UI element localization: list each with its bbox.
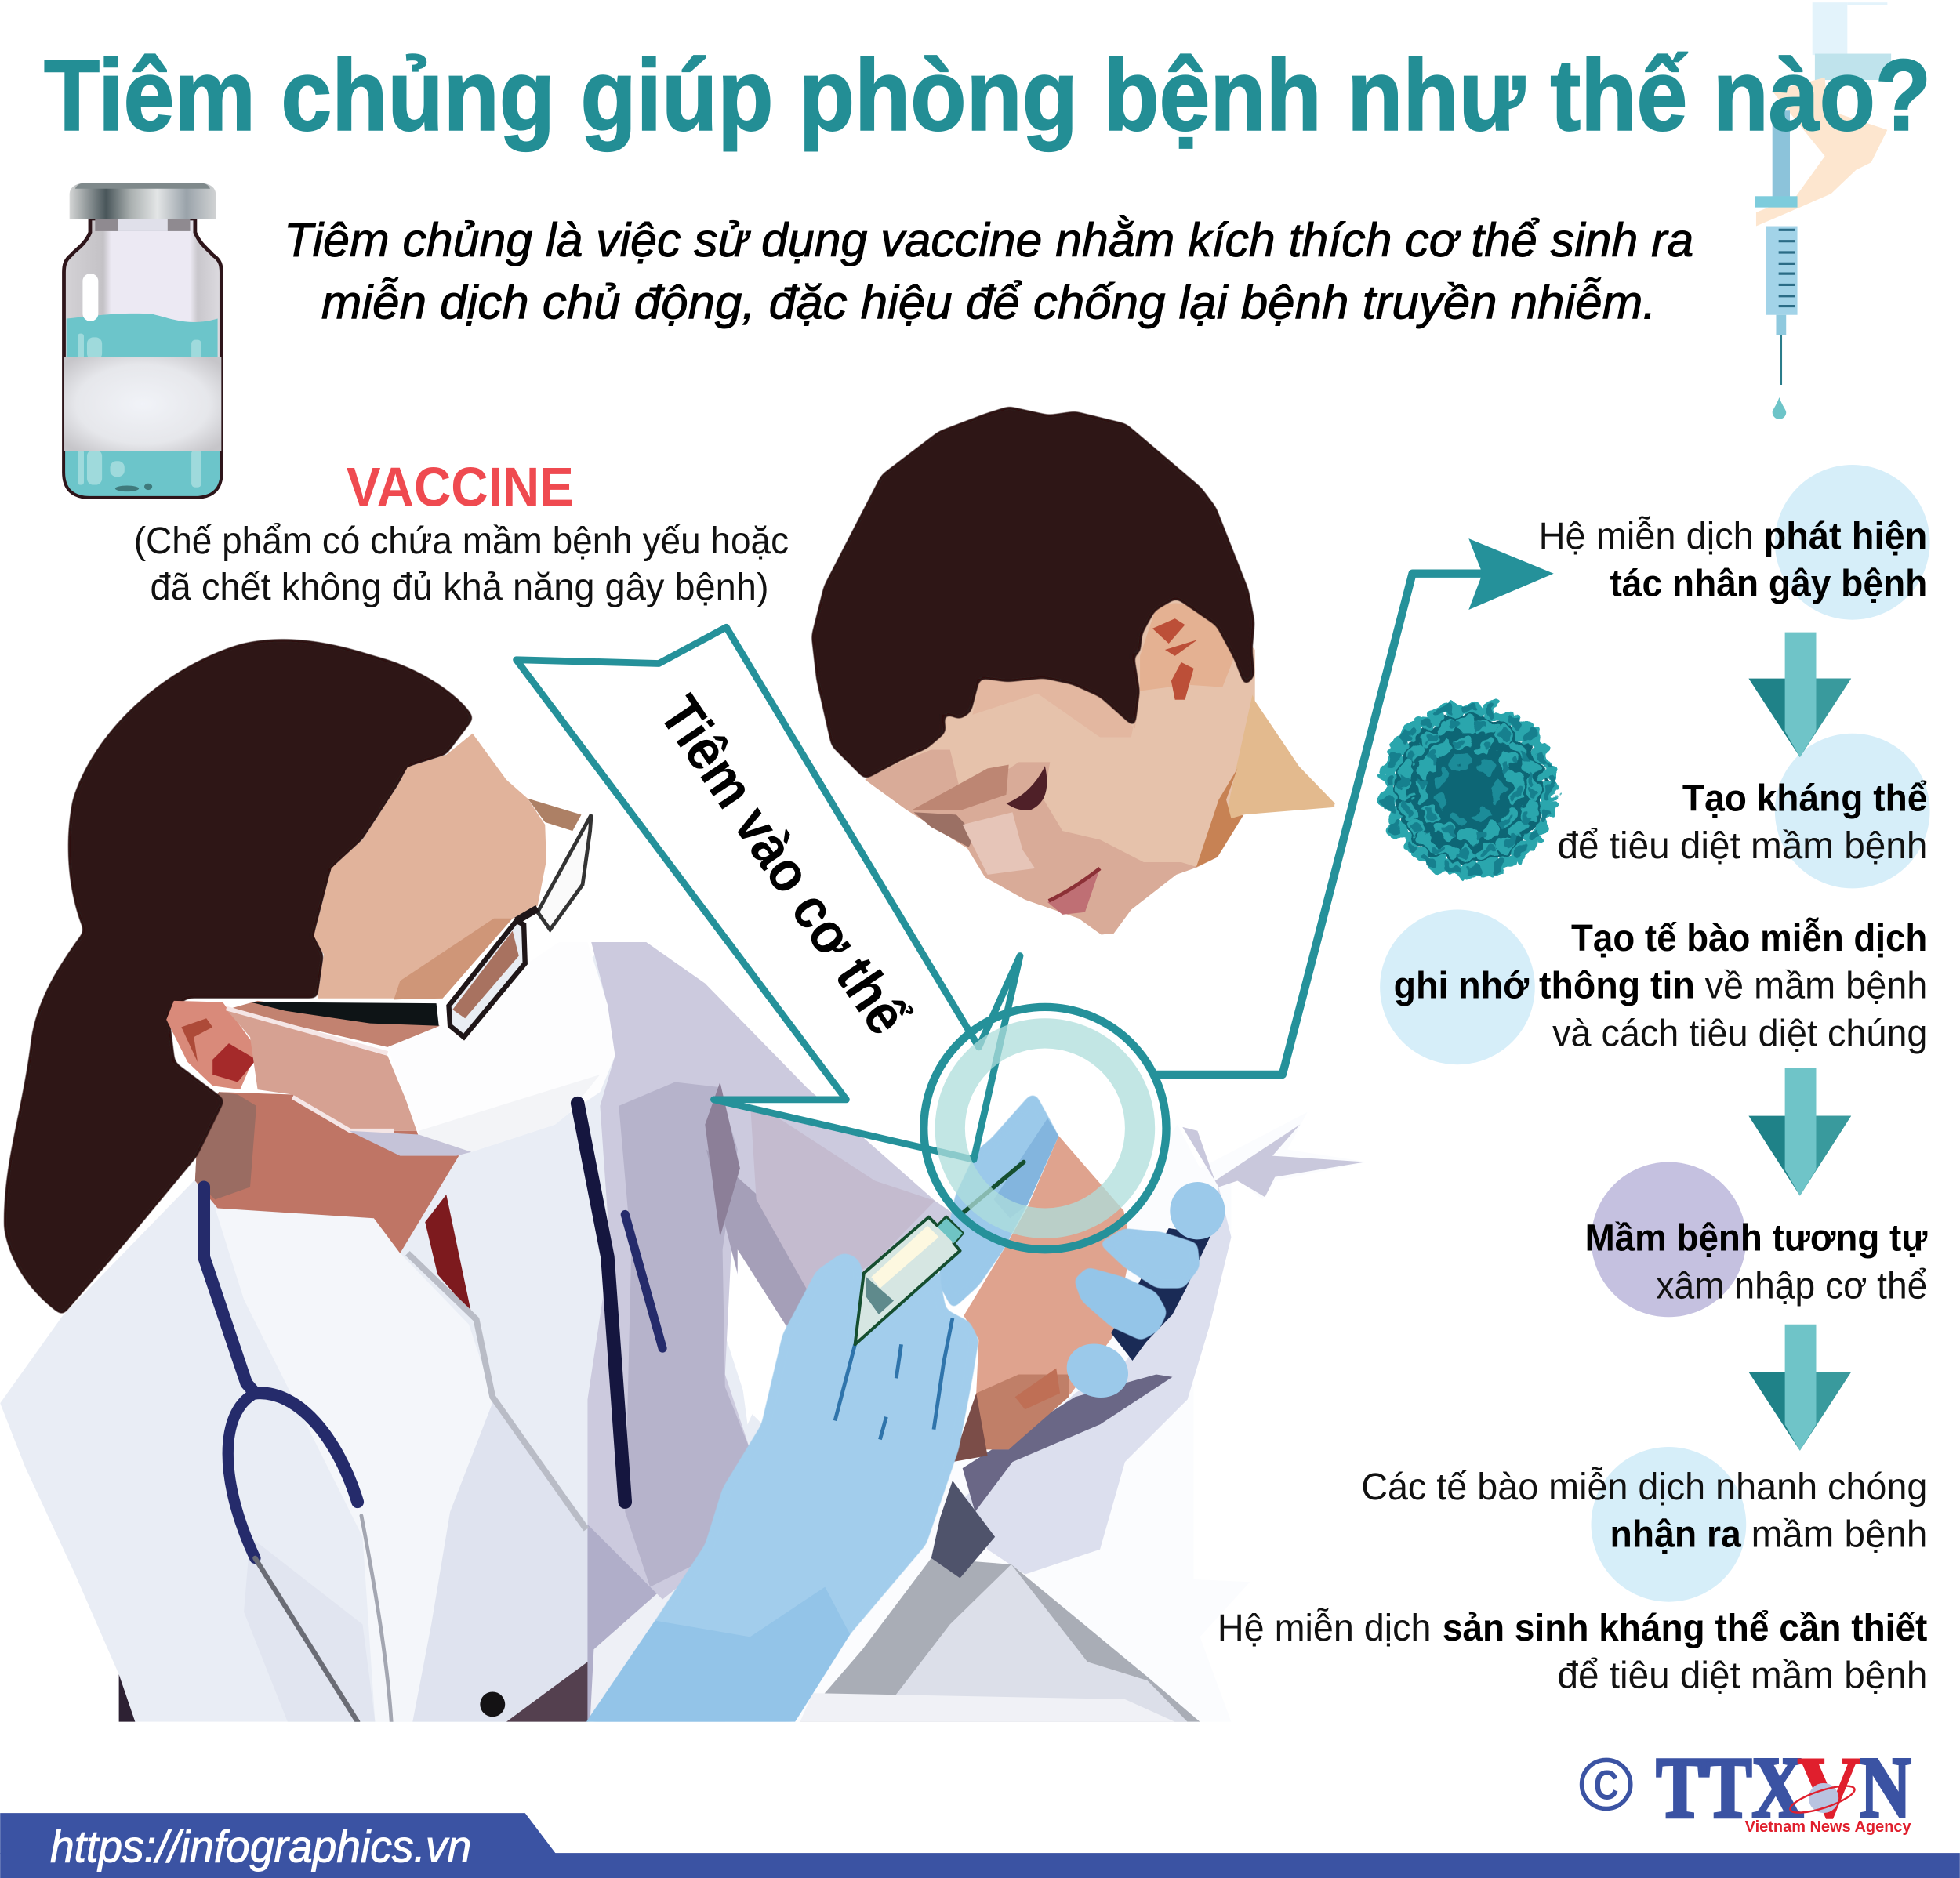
step 2 text: để tiêu diệt mầm bệnh <box>1557 825 1927 867</box>
illustration: glasses <box>250 814 591 1037</box>
illustration: patient's clothing <box>800 1125 1364 1722</box>
callout: Tiêm vào cơ thể: Tiêm vào cơ thể <box>647 684 920 1046</box>
circle: step 1 background <box>1775 465 1930 620</box>
arrow: step 1 to 2 <box>1748 633 1851 757</box>
step 5 text: nhận ra <box>1610 1514 1741 1556</box>
footer bar with website <box>0 1813 1960 1878</box>
step 4 text <box>1585 1218 1928 1307</box>
illustration: boy's head <box>811 406 1335 934</box>
step 6 text: sản sinh kháng thể cần thiết <box>1443 1608 1927 1649</box>
vaccine description: (Chế phẩm có chứa mầm bệnh yếu hoặc <box>134 520 789 562</box>
step 5 text: Các tế bào miễn dịch nhanh chóng <box>1361 1466 1927 1508</box>
footer bar with website: https://infographics.vn <box>50 1822 471 1872</box>
intro text: Tiêm chủng là việc sử dụng vaccine nhằm kích thích cơ thể sinh ra <box>284 213 1693 266</box>
step 5 text: mầm bệnh <box>1751 1514 1927 1556</box>
logo: TTXVN: N <box>1860 1740 1911 1836</box>
step 4 text: xâm nhập cơ thể <box>1656 1265 1927 1307</box>
illustration: stethoscope <box>204 1104 662 1722</box>
circle: step 2 background <box>1775 734 1930 888</box>
illustration: magnifier ring <box>924 1007 1167 1249</box>
step 5 text <box>1361 1466 1927 1556</box>
icon: syringe and hand top right <box>1755 2 1891 419</box>
illustration: doctor's neck, ear and red shirt <box>195 1092 586 1529</box>
illustration: doctor's gloved hand <box>586 1253 978 1722</box>
intro text <box>284 213 1693 329</box>
illustration: small syringe <box>855 1162 1024 1344</box>
magnifier background <box>924 1007 1167 1249</box>
logo: TTXVN: V <box>1798 1740 1861 1836</box>
vaccine description <box>134 520 789 608</box>
arrow: step 3 to 4 <box>1748 1068 1851 1196</box>
illustration: doctor's coat <box>0 950 800 1722</box>
step 3 text: ghi nhớ thông tin <box>1394 966 1695 1007</box>
circle: step 3 background <box>1380 910 1535 1064</box>
circle: step 4 background <box>1592 1162 1746 1317</box>
step 3 text: và cách tiêu diệt chúng <box>1552 1013 1927 1054</box>
step 2 text <box>1557 778 1927 867</box>
step 2 text: Tạo kháng thể <box>1682 778 1927 820</box>
logo: TTXVN <box>1582 1740 1911 1836</box>
callout: Tiêm vào cơ thể <box>517 627 1020 1159</box>
step 3 text: về mầm bệnh <box>1705 966 1927 1007</box>
intro text: miễn dịch chủ động, đặc hiệu để chống lại bệnh truyền nhiễm. <box>321 276 1656 329</box>
step 1 text: phát hiện <box>1764 516 1927 557</box>
vaccine heading: VACCINE <box>347 457 574 518</box>
step 1 text <box>1539 515 1927 604</box>
logo: TTXVN: C <box>1594 1763 1619 1809</box>
step 3 text: Tạo tế bào miễn dịch <box>1571 917 1927 959</box>
step 4 text: Mầm bệnh tương tự <box>1585 1218 1928 1260</box>
icon: pathogen cell <box>1388 709 1550 871</box>
step 6 text: để tiêu diệt mầm bệnh <box>1557 1655 1927 1697</box>
illustration: doctor's face <box>166 734 581 1089</box>
illustration: patient's gloved hand <box>938 1094 1225 1406</box>
illustration: patient's arm <box>953 1136 1131 1462</box>
arrow: step 4 to 5 <box>1748 1325 1851 1451</box>
icon: vaccine vial <box>64 183 221 497</box>
step 1 text: Hệ miễn dịch <box>1539 515 1754 557</box>
logo: TTXVN: TTX <box>1656 1740 1804 1836</box>
illustration: surgical mask <box>227 942 615 1156</box>
step 3 text <box>1394 917 1927 1054</box>
arrow: to immune detection <box>1156 538 1554 1075</box>
step 6 text: Hệ miễn dịch <box>1218 1607 1431 1649</box>
logo: TTXVN: Vietnam News Agency <box>1745 1818 1911 1836</box>
circle: step 5 background <box>1592 1447 1746 1602</box>
step 1 text: tác nhân gây bệnh <box>1610 563 1927 604</box>
illustration: coat sleeve <box>587 942 960 1600</box>
illustration: doctor's hair <box>4 639 474 1316</box>
vaccine description: đã chết không đủ khả năng gây bệnh) <box>150 567 769 608</box>
step 6 text <box>1218 1607 1927 1697</box>
